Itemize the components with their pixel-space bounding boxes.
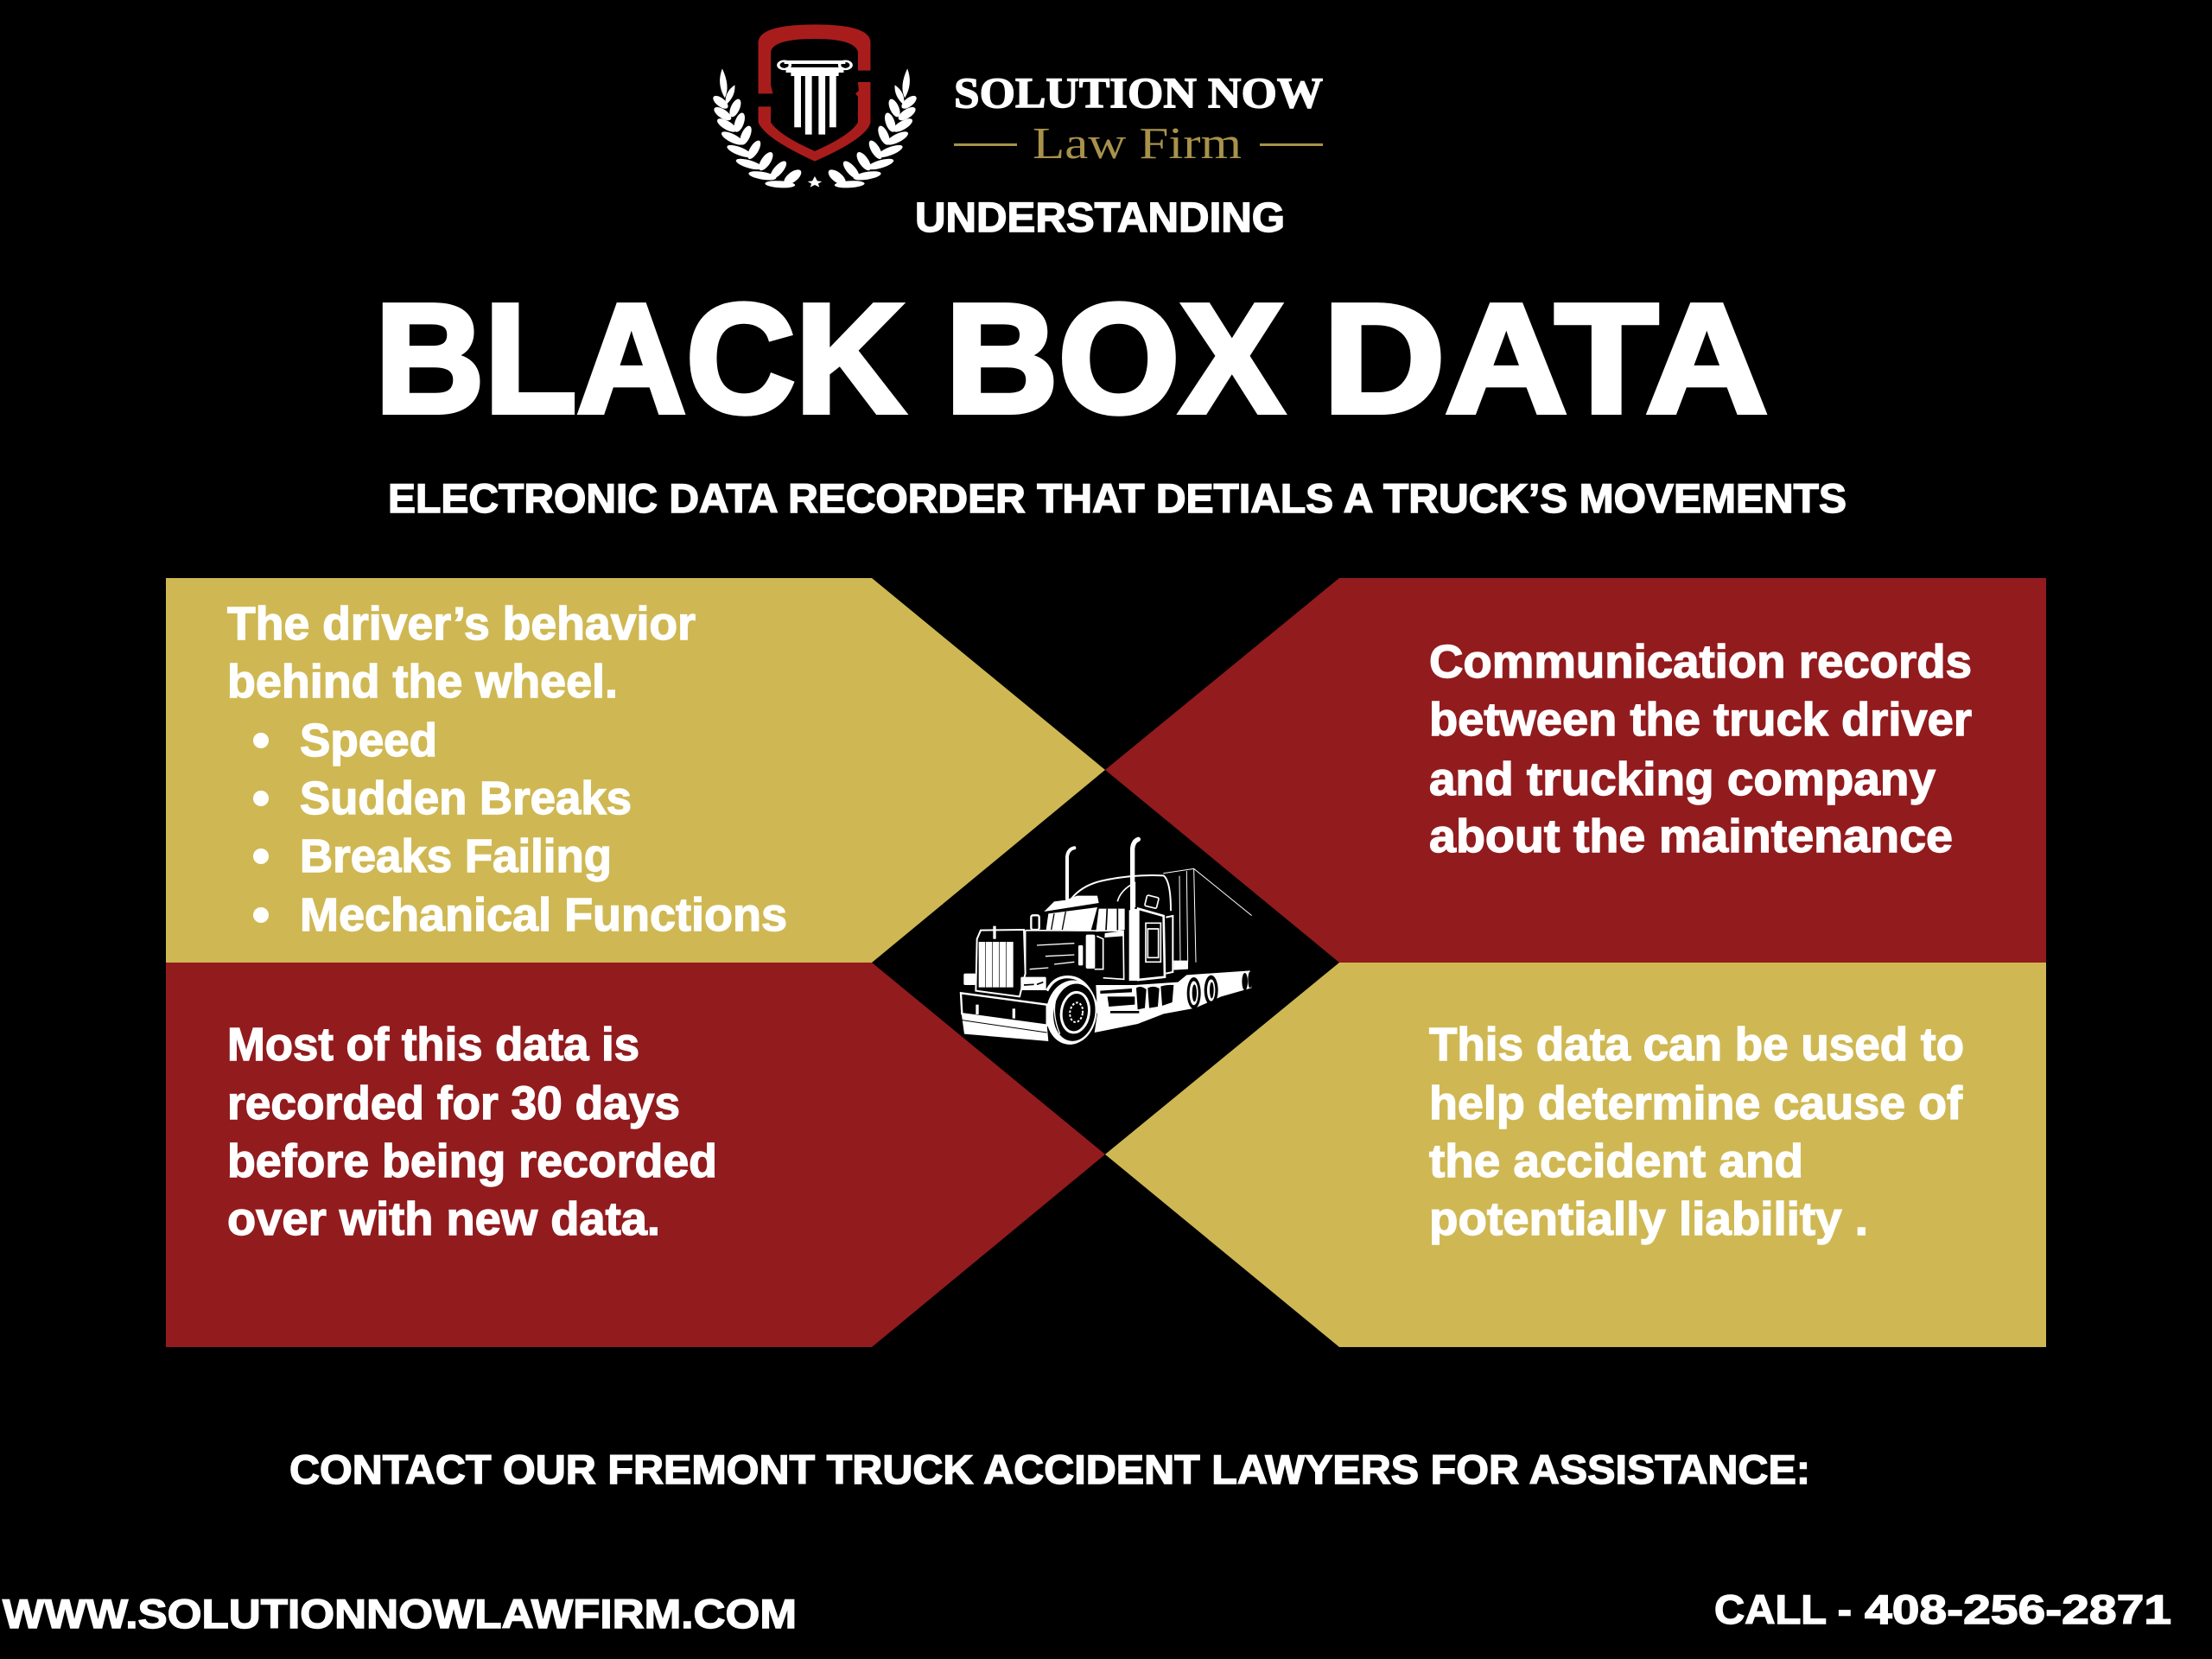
panel: use of data: potentially liability . <box>1429 1193 1868 1245</box>
radiator <box>976 930 1026 996</box>
windshield <box>1046 907 1097 931</box>
subtitle: ELECTRONIC DATA RECORDER THAT DETIALS A TRUCK’S MOVEMENTS <box>388 475 1847 521</box>
panel: communication records: about the maintenance <box>1429 810 1953 862</box>
panel: use of data: the accident and <box>1429 1135 1803 1187</box>
panel: communication records <box>1105 578 2046 963</box>
phone number: 408-256-2871 <box>1865 1586 2171 1632</box>
panel: use of data: help determine cause of <box>1429 1077 1963 1129</box>
list of behaviors: Speed <box>300 715 437 766</box>
panel: use of data <box>1105 963 2046 1347</box>
website: WWW.SOLUTIONNOWLAWFIRM.COM <box>3 1591 797 1637</box>
title <box>375 272 1768 446</box>
panel: data retention: recorded for 30 days <box>227 1077 680 1129</box>
icon: semi truck <box>961 839 1252 1048</box>
panel: data retention <box>166 963 1105 1347</box>
undercarriage <box>1095 970 1251 1033</box>
logo name: SOLUTION NOW <box>954 68 1323 117</box>
bumper <box>961 993 1047 1026</box>
panel: use of data: This data can be used to <box>1429 1019 1964 1071</box>
panel: communication records: and trucking company <box>1429 753 1936 805</box>
roof lights <box>1044 896 1099 912</box>
icon: shield and pillar with laurels <box>710 24 919 188</box>
heading: understanding: UNDERSTANDING <box>915 195 1285 241</box>
title: BLACK <box>375 272 905 446</box>
panel: data retention: over with new data. <box>227 1193 660 1245</box>
contact heading: CONTACT OUR FREMONT TRUCK ACCIDENT LAWYERS FOR ASSISTANCE: <box>289 1446 1810 1492</box>
logo subtitle: Law Firm <box>1033 119 1242 168</box>
logo: Solution Now Law Firm <box>710 24 1323 188</box>
panel: driver behavior <box>166 578 1105 963</box>
hood <box>1026 931 1124 979</box>
front wheel <box>1042 977 1101 1048</box>
panel: communication records: between the truck driver <box>1429 694 1972 746</box>
phone number <box>1714 1586 2171 1632</box>
list of behaviors: Breaks Failing <box>300 830 612 882</box>
phone number: CALL - <box>1714 1586 1852 1632</box>
panel: driver behavior: behind the wheel. <box>227 656 618 708</box>
fender <box>1047 977 1100 1018</box>
panel: driver behavior: The driver’s behavior <box>227 598 696 650</box>
panel: data retention: Most of this data is <box>227 1019 639 1071</box>
rear wheels <box>1187 977 1201 1009</box>
panel: communication records: Communication records <box>1429 636 1972 688</box>
logo subtitle <box>954 119 1323 168</box>
list of behaviors: Sudden Breaks <box>300 772 632 824</box>
list of behaviors: Mechanical Functions <box>300 889 787 941</box>
cab door <box>1138 909 1165 980</box>
title: BOX <box>945 272 1284 446</box>
side window <box>1096 909 1125 931</box>
title: DATA <box>1323 272 1768 446</box>
list of behaviors <box>253 715 787 941</box>
panel: data retention: before being recorded <box>227 1135 717 1187</box>
